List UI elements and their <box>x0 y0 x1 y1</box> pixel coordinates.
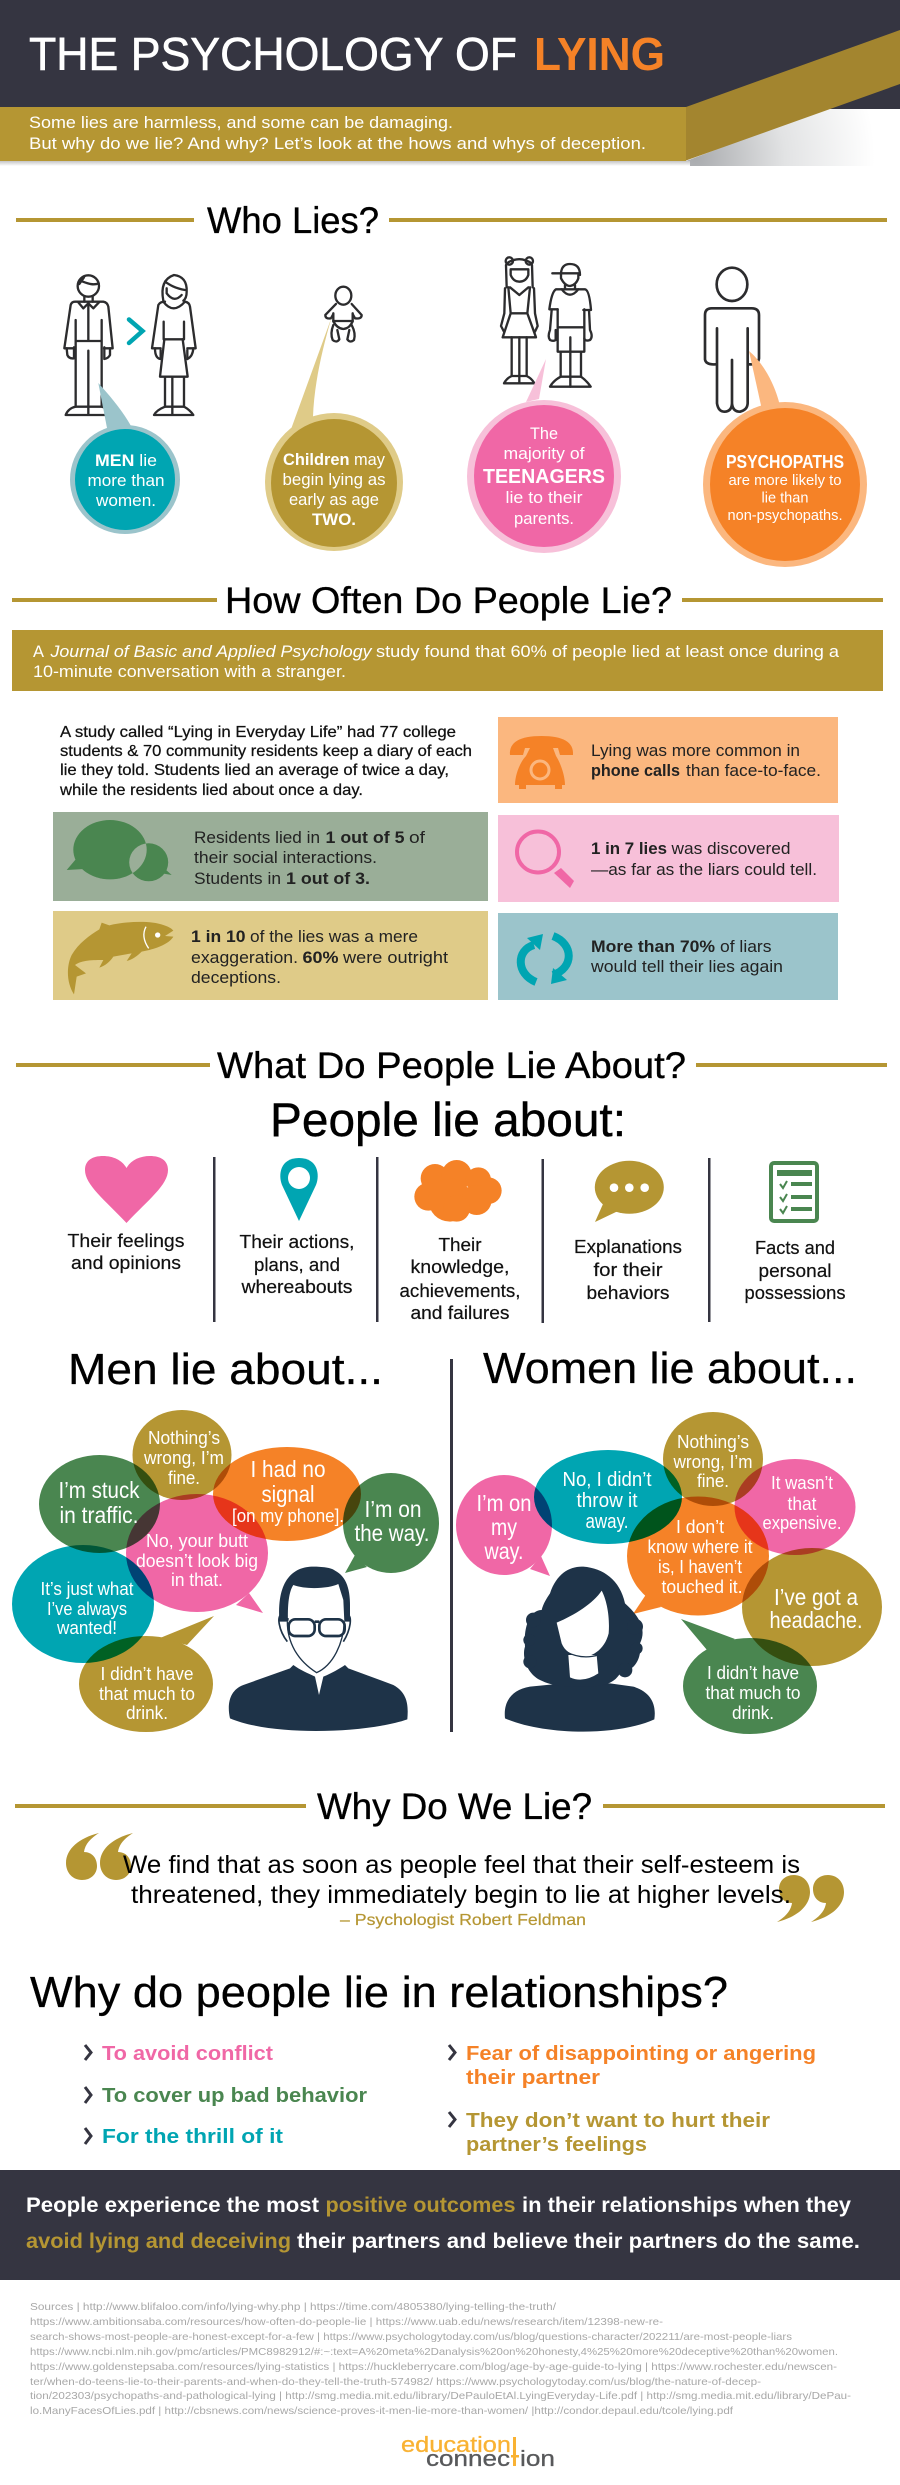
bubble: teenagers: parents. <box>514 509 574 528</box>
icon: psychopath figure <box>705 268 759 412</box>
panel: journal study band <box>12 630 883 691</box>
text block: everyday life study <box>59 724 472 799</box>
list: relationship reasons: partner’s feelings <box>466 2134 647 2156</box>
bubble: men: MEN lie <box>95 451 157 470</box>
bubble: psychopaths: are more likely to <box>728 472 842 489</box>
heading: women lie about: Women lie about... <box>483 1344 857 1393</box>
panel: exaggeration: 1 in 10 <box>191 928 246 946</box>
list: relationship reasons: They don’t want to hurt their <box>466 2110 770 2132</box>
speech bubble text: men: the way. <box>354 1520 430 1546</box>
topic: feelings: Their feelings <box>68 1231 184 1251</box>
text block: everyday life study: A study called “Lying in Everyday Life” had 77 college <box>60 724 456 741</box>
speech bubble text: women: I’m on <box>476 1490 532 1516</box>
bubble: teenagers <box>467 359 621 553</box>
topic: explanations: for their <box>594 1260 662 1280</box>
heading: men lie about: Men lie about... <box>68 1345 383 1394</box>
speech bubble text: men: I’ve always <box>47 1599 127 1619</box>
bubble: psychopaths: lie than <box>762 490 808 506</box>
heading: people lie about: People lie about: <box>270 1093 626 1146</box>
text block: sources: Sources | http://www.blifaloo.com/info/lying-why.php | https://time.com/4805380/lying-telling-the-truth/ <box>30 2301 556 2313</box>
title: THE PSYCHOLOGY OF <box>29 28 517 80</box>
icon: fish <box>68 922 173 994</box>
panel: who lies figures and bubbles <box>64 257 867 567</box>
section heading: what do people lie about: What Do People Lie About? <box>217 1045 686 1086</box>
speech bubble text: men: drink. <box>126 1703 168 1723</box>
topic: facts: possessions <box>744 1283 846 1303</box>
text block: sources: ter/when-do-teens-lie-to-their-parents-and-when-do-they-tell-the-truth-574982/ https://www.psychologytoday.com/us/blog/the-nature-of-decep- <box>30 2376 762 2388</box>
panel: exaggeration <box>53 911 488 1000</box>
topic: explanations: Explanations <box>574 1237 682 1257</box>
speech bubble text: women: I didn’t have <box>707 1663 799 1683</box>
subtitle: But why do we lie? And why? Let’s look at the hows and whys of deception. <box>29 134 646 153</box>
speech bubble text: women: that much to <box>706 1683 800 1703</box>
text block: sources: https://www.goldenstepsaba.com/resources/lying-statistics | https://huckleberrycare.com/blog/age-by-age-guide-to-lying | https://www.rochester.edu/newscen- <box>30 2361 838 2373</box>
logo: education connection <box>401 2432 555 2471</box>
topic: knowledge: Their <box>438 1235 482 1255</box>
text block: everyday life study: students & 70 community residents keep a diary of each <box>60 743 472 760</box>
topic: actions <box>240 1158 354 1297</box>
speech bubble text: women: away. <box>586 1511 628 1533</box>
speech bubble text: men: fine. <box>168 1468 200 1488</box>
list: relationship reasons <box>85 2043 816 2156</box>
speech bubble text: men: I’m stuck <box>58 1477 140 1503</box>
icon: overlapping speech bubbles <box>67 820 172 881</box>
panel: conclusion band: positive outcomes <box>326 2194 516 2217</box>
panel: social interactions: Residents lied in <box>194 829 320 847</box>
panel: phone calls: Lying was more common in <box>591 742 800 760</box>
icon: greater-than chevron <box>129 320 142 343</box>
logo: education connection: education <box>401 2432 511 2457</box>
panel: exaggeration: of the lies was a mere <box>250 928 418 946</box>
speech bubble text: men: Nothing’s <box>148 1428 220 1448</box>
panel: exaggeration: 60% <box>302 949 339 967</box>
text block: sources <box>30 2301 852 2417</box>
panel: phone calls: than face-to-face. <box>686 762 821 780</box>
topic: actions: whereabouts <box>240 1277 352 1297</box>
panel: social interactions: of <box>409 829 425 847</box>
panel: social interactions: 1 out of 3. <box>286 870 370 888</box>
topic: facts <box>744 1163 846 1303</box>
section heading: why do we lie: Why Do We Lie? <box>317 1786 592 1827</box>
speech bubble text: men: I’m on <box>364 1496 422 1522</box>
speech bubble text: women: No, I didn’t <box>562 1469 652 1491</box>
speech bubble text: women: fine. <box>697 1471 729 1491</box>
topic: actions: Their actions, <box>240 1232 354 1252</box>
panel: conclusion band: their partners and believe their partners do the same. <box>297 2230 860 2253</box>
topic: facts: personal <box>758 1261 832 1281</box>
topic: knowledge: knowledge, <box>410 1257 510 1277</box>
icon: closing quote marks <box>777 1875 844 1922</box>
topic: feelings <box>68 1156 184 1273</box>
panel: feldman quote: threatened, they immediately begin to lie at higher levels. <box>131 1881 791 1909</box>
speech bubbles: women <box>456 1412 882 1734</box>
bubble: children: Children may <box>283 450 385 469</box>
speech bubble text: women: expensive. <box>762 1513 842 1533</box>
speech bubble text: women: wrong, I’m <box>673 1452 752 1472</box>
icon: woman <box>152 275 196 415</box>
panel: exaggeration: were outright <box>342 949 448 967</box>
panel: conclusion band: in their relationships when they <box>522 2194 851 2217</box>
bubble: teenagers: TEENAGERS <box>483 466 605 488</box>
icon: opening quote marks <box>66 1833 133 1880</box>
speech bubble text: women: my <box>491 1514 517 1540</box>
speech bubble text: men: doesn’t look big <box>136 1551 258 1571</box>
icon: magnifying glass <box>517 832 574 888</box>
speech bubble text: women: that <box>788 1494 816 1514</box>
logo: education connection: connec <box>426 2446 510 2471</box>
speech bubble text: women <box>476 1432 862 1723</box>
section heading: how often <box>12 580 883 621</box>
topic: explanations <box>574 1161 682 1303</box>
bubble: children: begin lying as <box>282 470 386 489</box>
speech bubble text: men: [on my phone]. <box>232 1506 344 1526</box>
title: LYING <box>534 28 665 80</box>
panel: exaggeration: deceptions. <box>191 969 281 987</box>
speech bubble text: men: I didn’t have <box>100 1664 194 1684</box>
topic: knowledge <box>400 1160 520 1323</box>
panel: feldman quote: We find that as soon as people feel that their self-esteem is <box>123 1851 800 1879</box>
speech bubble text: men: signal <box>262 1481 314 1507</box>
section heading: who lies <box>16 200 887 241</box>
panel: conclusion band: People experience the most <box>26 2194 319 2217</box>
icon: woman silhouette <box>505 1567 655 1732</box>
speech bubble text: men: wanted! <box>56 1618 117 1638</box>
panel: feldman quote <box>66 1833 844 1929</box>
speech bubble text: men: No, your butt <box>146 1531 248 1551</box>
text block: everyday life study: lie they told. Students lied an average of twice a day, <box>60 762 449 779</box>
speech bubble text: women: Nothing’s <box>677 1432 749 1452</box>
bubble: psychopaths: non-psychopaths. <box>728 507 842 524</box>
bubble: men: more than <box>88 471 164 490</box>
list: relationship reasons: their partner <box>466 2067 600 2089</box>
speech bubble text: men: in traffic. <box>60 1502 138 1528</box>
section heading: how often: How Often Do People Lie? <box>225 580 672 621</box>
bubble: men: women. <box>95 491 156 510</box>
panel: journal study band: A <box>33 642 45 661</box>
panel: feldman quote: – Psychologist Robert Feldman <box>340 1912 586 1929</box>
topic: knowledge: achievements, <box>400 1281 520 1301</box>
panel: exaggeration: exaggeration. <box>191 949 298 967</box>
header banner <box>0 0 900 166</box>
section heading: who lies: Who Lies? <box>207 200 379 241</box>
icon: telephone <box>510 736 573 789</box>
panel: journal study band: Journal of Basic and Applied Psychology <box>49 642 373 661</box>
topic: actions: plans, and <box>254 1255 340 1275</box>
subtitle: Some lies are harmless, and some can be damaging. <box>29 113 453 132</box>
bubble: psychopaths: PSYCHOPATHS <box>726 452 844 472</box>
bubble: children <box>265 317 403 551</box>
speech bubble text: women: I’ve got a <box>774 1584 858 1610</box>
panel: would lie again <box>498 913 838 1000</box>
panel: phone calls: phone calls <box>591 762 680 780</box>
speech bubble text: women: headache. <box>770 1607 862 1633</box>
panel: discovered lies: was discovered <box>670 840 790 858</box>
panel: conclusion band: avoid lying and deceiving <box>26 2230 291 2253</box>
speech bubble text: men: wrong, I’m <box>143 1448 224 1468</box>
list: relationship reasons: To avoid conflict <box>102 2043 273 2065</box>
panel: would lie again: would tell their lies again <box>590 958 783 976</box>
speech bubble text: women: touched it. <box>662 1577 742 1597</box>
speech bubble text: men: I had no <box>250 1456 326 1482</box>
panel: discovered lies <box>498 815 839 902</box>
list: relationship reasons: Fear of disappointing or angering <box>466 2043 816 2065</box>
topic: explanations: behaviors <box>586 1283 670 1303</box>
bubble: children: early as age <box>289 490 379 509</box>
speech bubble text: women: I don’t <box>676 1517 724 1537</box>
panel: journal study band: study found that 60% of people lied at least once during a <box>376 642 840 661</box>
speech bubble text: men: It’s just what <box>40 1579 134 1599</box>
icon: teen boy <box>549 264 592 387</box>
topic: feelings: and opinions <box>71 1253 181 1273</box>
icon: teen girl <box>501 257 538 383</box>
logo: education connection: ion <box>520 2446 555 2471</box>
heading: why do people lie in relationships: Why do people lie in relationships? <box>30 1968 728 2017</box>
list: relationship reasons: To cover up bad behavior <box>102 2085 367 2107</box>
speech bubble text: women: know where it <box>648 1537 752 1557</box>
text block: sources: https://www.ncbi.nlm.nih.gov/pmc/articles/PMC8982912/#:~:text=A%20meta%2Danalysis%20on%20honesty,4%25%20more%20deceptive%20than%20women. <box>30 2346 838 2358</box>
panel: would lie again: of liars <box>720 938 772 956</box>
bubble: teenagers: lie to their <box>506 488 583 507</box>
topic: knowledge: and failures <box>410 1303 510 1323</box>
subtitle <box>29 113 646 153</box>
panel: social interactions <box>53 812 488 901</box>
speech bubble text: women: throw it <box>576 1490 638 1512</box>
icon: baby <box>325 287 362 342</box>
panel: discovered lies: —as far as the liars could tell. <box>591 861 817 879</box>
panel: would lie again: More than 70% <box>591 938 715 956</box>
bubble: teenagers: The <box>530 424 558 443</box>
panel: journal study band: 10-minute conversation with a stranger. <box>33 662 346 681</box>
icon: cycle arrows <box>521 934 569 984</box>
speech bubble text: men: in that. <box>171 1570 223 1590</box>
speech bubble text: women: way. <box>484 1538 524 1564</box>
panel: social interactions: their social interactions. <box>194 849 377 867</box>
speech bubble text: men <box>40 1428 430 1723</box>
speech bubbles: men <box>12 1410 439 1732</box>
speech bubble text: women: is, I haven’t <box>658 1557 742 1577</box>
icon: man <box>64 275 113 415</box>
text block: everyday life study: while the residents lied about once a day. <box>59 782 363 799</box>
bubble: men <box>70 383 180 534</box>
bubble: teenagers: majority of <box>504 444 585 463</box>
section heading: what do people lie about <box>16 1045 887 1086</box>
panel: social interactions: 1 out of 5 <box>326 829 404 847</box>
speech bubble text: women: It wasn’t <box>771 1473 833 1493</box>
text block: sources: search-shows-most-people-are-honest-except-for-a-few | https://www.psychologytoday.com/us/blog/questions-character/202211/are-most-people-liars <box>30 2331 792 2343</box>
bubble: children: TWO. <box>312 510 356 529</box>
text block: sources: https://www.ambitionsaba.com/resources/how-often-do-people-lie | https://www.uab.edu/news/research/item/12398-new-re- <box>30 2316 664 2328</box>
speech bubble text: women: drink. <box>732 1703 774 1723</box>
icon: man silhouette with glasses <box>229 1567 408 1731</box>
panel: phone calls <box>498 717 838 803</box>
list: relationship reasons: For the thrill of it <box>102 2126 283 2148</box>
text block: sources: tion/202303/psychopaths-and-pathological-lying | http://smg.media.mit.edu/library/DePauloEtAl.LyingEveryday-Life.pdf | http://smg.media.mit.edu/library/DePau- <box>30 2390 852 2402</box>
panel: social interactions: Students in <box>194 870 281 888</box>
panel: discovered lies: 1 in 7 lies <box>591 840 667 858</box>
text block: sources: lo.ManyFacesOfLies.pdf | http://cbsnews.com/news/science-proves-it-men-lie-more-than-women/ |http://condor.depaul.edu/tcole/lying.pdf <box>30 2405 733 2417</box>
topic: facts: Facts and <box>755 1238 835 1258</box>
panel: conclusion band <box>0 2170 900 2280</box>
section heading: why do we lie <box>15 1786 885 1827</box>
bubble: psychopaths <box>703 351 867 567</box>
speech bubble text: men: that much to <box>99 1684 195 1704</box>
panel: topics row <box>68 1156 846 1323</box>
